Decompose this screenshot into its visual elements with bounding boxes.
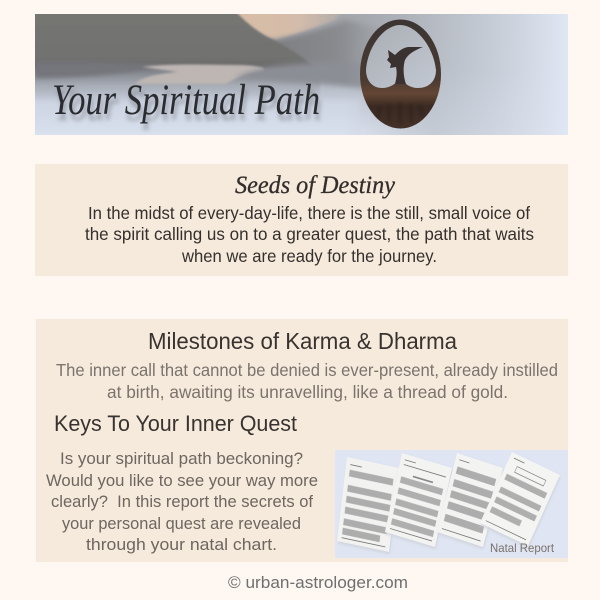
report sheet 3 — [437, 453, 504, 549]
banner — [35, 14, 568, 135]
image: natal report pages — [335, 450, 568, 558]
caption: Natal Report: Natal Report — [490, 541, 555, 555]
banner landscape: sunset sky, hills and lake — [35, 14, 376, 106]
text block: inner call — [56, 360, 558, 402]
text block: report description: Is your spiritual path beckoning? — [60, 449, 303, 468]
report sheet 4 — [479, 452, 561, 548]
report sheet 1 — [337, 457, 400, 554]
text block: report description: through your natal chart. — [86, 535, 277, 554]
banner title: Your Spiritual Path — [52, 77, 320, 124]
text block: report description — [46, 449, 318, 554]
text block: report description: clearly? In this report the secrets of — [51, 492, 313, 511]
text block: intro — [85, 203, 534, 266]
text block: inner call: The inner call that cannot be denied is ever-present, already instilled — [56, 360, 558, 380]
text block: report description: Would you like to see your way more — [46, 471, 318, 490]
footer credit: © urban-astrologer.com — [228, 574, 408, 592]
heading: Seeds of Destiny: Seeds of Destiny — [235, 172, 396, 199]
text block: intro: when we are ready for the journey. — [181, 246, 437, 266]
text block: intro: the spirit calling us on to a greater quest, the path that waits — [85, 224, 534, 244]
report sheet 2 — [385, 453, 453, 549]
panel: Seeds of Destiny — [35, 164, 568, 276]
panel: Milestones and Keys — [36, 319, 568, 562]
text block: report description: your personal quest are revealed — [62, 514, 301, 533]
text block: intro: In the midst of every-day-life, there is the still, small voice of — [88, 203, 530, 223]
text block: inner call: at birth, awaiting its unravelling, like a thread of gold. — [107, 382, 508, 402]
banner title: Your Spiritual Path — [54, 83, 322, 130]
heading: Milestones of Karma & Dharma: Milestones of Karma & Dharma — [148, 328, 457, 354]
icon: oval phoenix emblem — [360, 20, 441, 128]
heading: Keys To Your Inner Quest: Keys To Your Inner Quest — [54, 411, 297, 436]
